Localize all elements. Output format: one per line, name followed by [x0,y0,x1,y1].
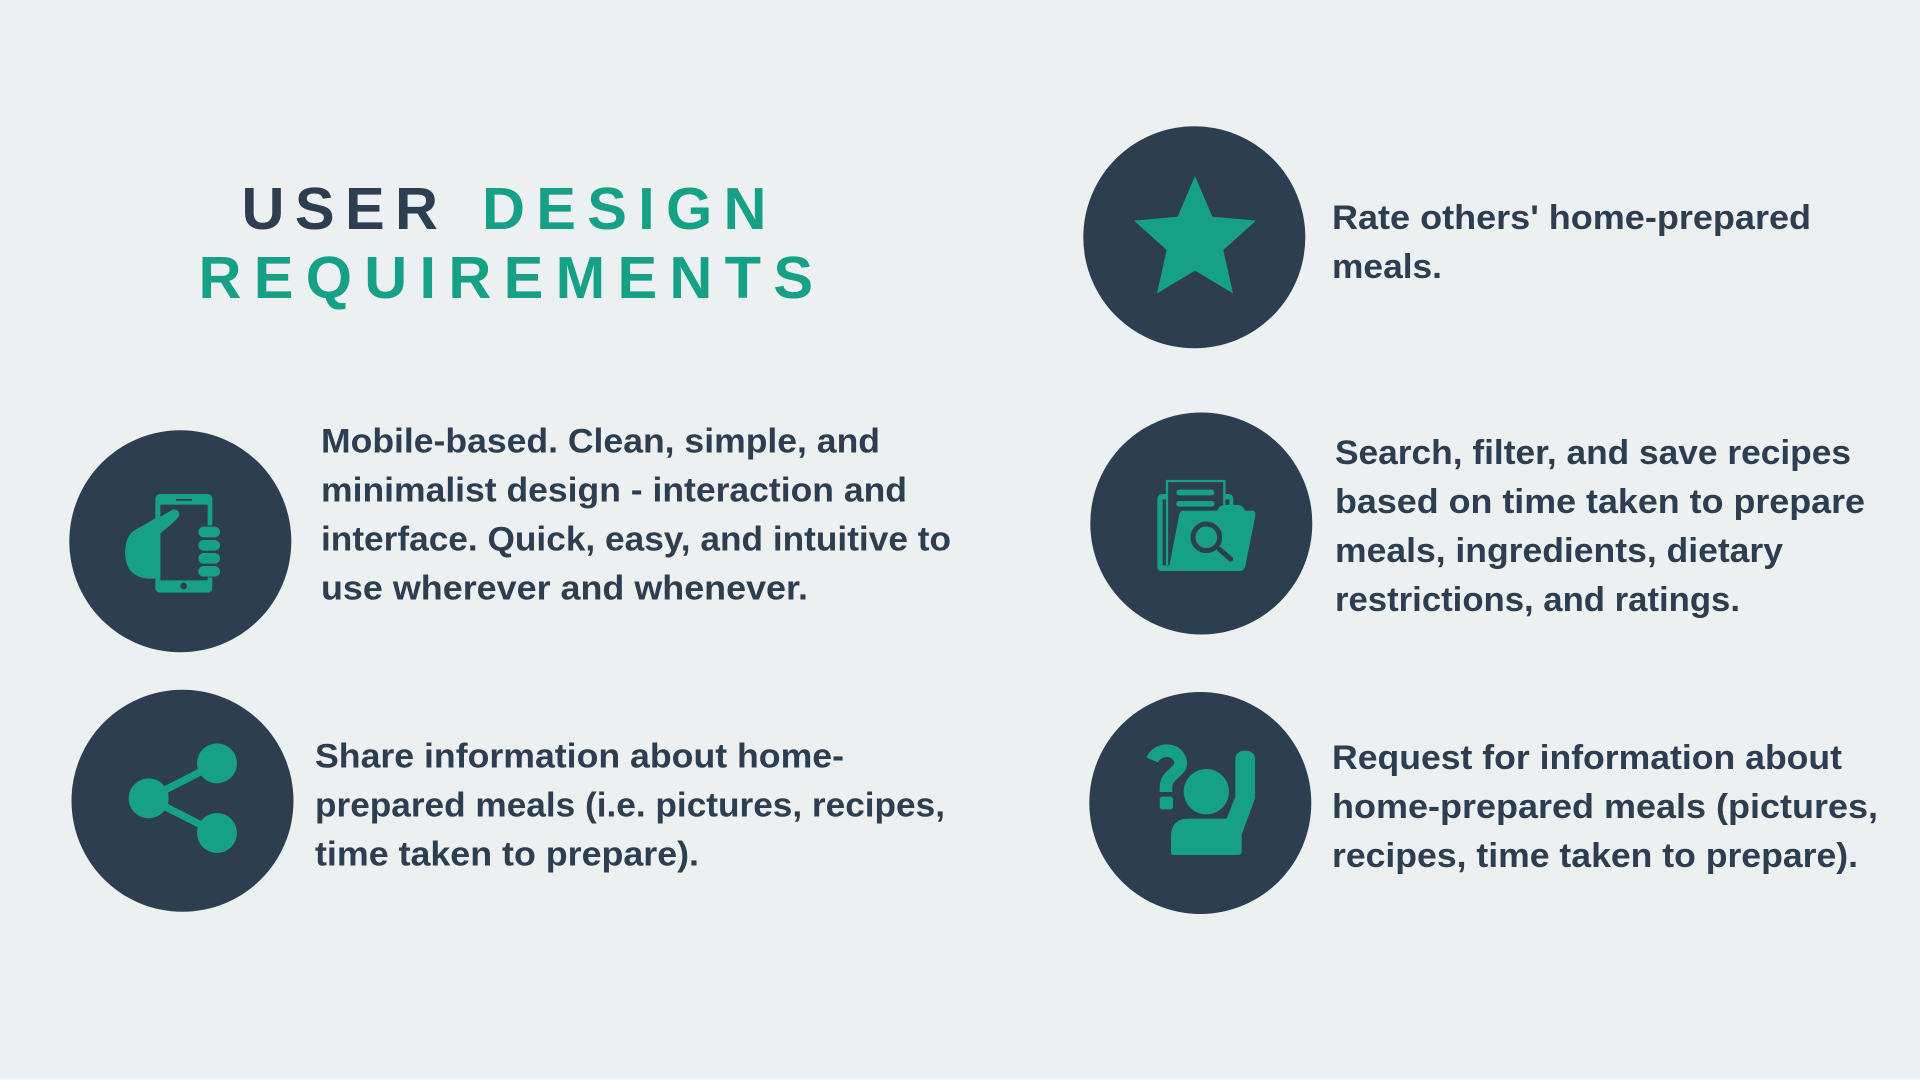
icon: person raising hand with question mark [1089,692,1311,914]
text block: mobile-based: use wherever and whenever. [321,570,808,608]
text block: share information: time taken to prepare). [315,836,699,874]
text block: request information [1332,739,1878,875]
text block: request information: home-prepared meals (pictures, [1332,788,1878,826]
title: REQUIREMENTS [198,244,813,311]
text block: share information [315,738,945,874]
text block: search and filter: restrictions, and ratings. [1335,581,1740,619]
text block: search and filter [1335,434,1865,619]
title: DESIGN [482,175,766,242]
text block: request information: recipes, time taken to prepare). [1332,837,1858,875]
icon: star [1083,126,1305,348]
text block: search and filter: meals, ingredients, dietary [1335,532,1783,570]
text block: mobile-based: Mobile-based. Clean, simple, and [321,422,880,460]
text block: rate meals [1332,199,1811,286]
text block: rate meals: meals. [1332,248,1442,286]
text block: share information: Share information about home- [315,738,844,776]
text block: request information: Request for information about [1332,739,1842,777]
title [198,175,813,311]
icon: share [72,690,294,912]
text block: mobile-based: interface. Quick, easy, and intuitive to [321,520,951,558]
text block: search and filter: Search, filter, and save recipes [1335,434,1851,472]
text block: rate meals: Rate others' home-prepared [1332,199,1811,237]
icon: mobile phone held in hand [69,430,291,652]
title: USER [242,175,438,242]
text block: search and filter: based on time taken to prepare [1335,483,1865,521]
text block: share information: prepared meals (i.e. pictures, recipes, [315,786,945,824]
text block: mobile-based: minimalist design - interaction and [321,472,907,510]
text block: mobile-based [321,422,951,608]
icon: folder with magnifier [1090,412,1312,634]
